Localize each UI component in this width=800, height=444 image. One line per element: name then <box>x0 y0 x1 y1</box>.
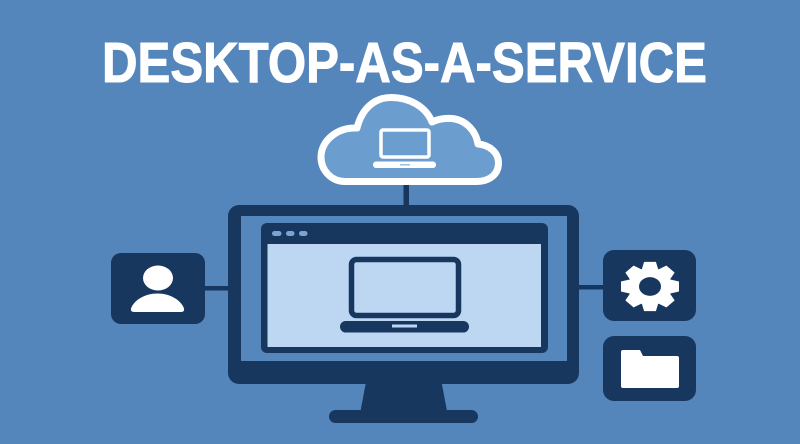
laptop base <box>340 321 469 332</box>
monitor <box>228 205 579 423</box>
cloud laptop trackpad <box>400 164 410 166</box>
monitor body <box>228 205 579 384</box>
monitor stand base <box>329 410 478 423</box>
icon: gear <box>622 262 678 311</box>
icon: cloud with laptop <box>321 98 498 182</box>
laptop screen <box>352 260 458 316</box>
application window <box>261 223 548 353</box>
connector: monitor to settings <box>578 285 604 290</box>
cloud laptop screen <box>381 130 429 157</box>
window control dots <box>272 231 308 236</box>
laptop trackpad <box>392 324 417 328</box>
cloud laptop base <box>373 162 436 168</box>
icon: user body <box>131 294 184 312</box>
monitor stand <box>360 382 447 411</box>
tile: user <box>111 253 205 324</box>
laptop icon <box>340 260 469 332</box>
monitor screen <box>241 216 567 361</box>
tile: folder <box>603 336 696 401</box>
connector: cloud to monitor <box>404 184 409 206</box>
icon: user head <box>143 266 173 290</box>
window content <box>268 244 541 347</box>
tile: settings <box>603 250 696 321</box>
icon: folder <box>621 350 679 388</box>
title: DESKTOP-AS-A-SERVICE <box>102 31 707 94</box>
connector: user to monitor <box>204 286 229 290</box>
